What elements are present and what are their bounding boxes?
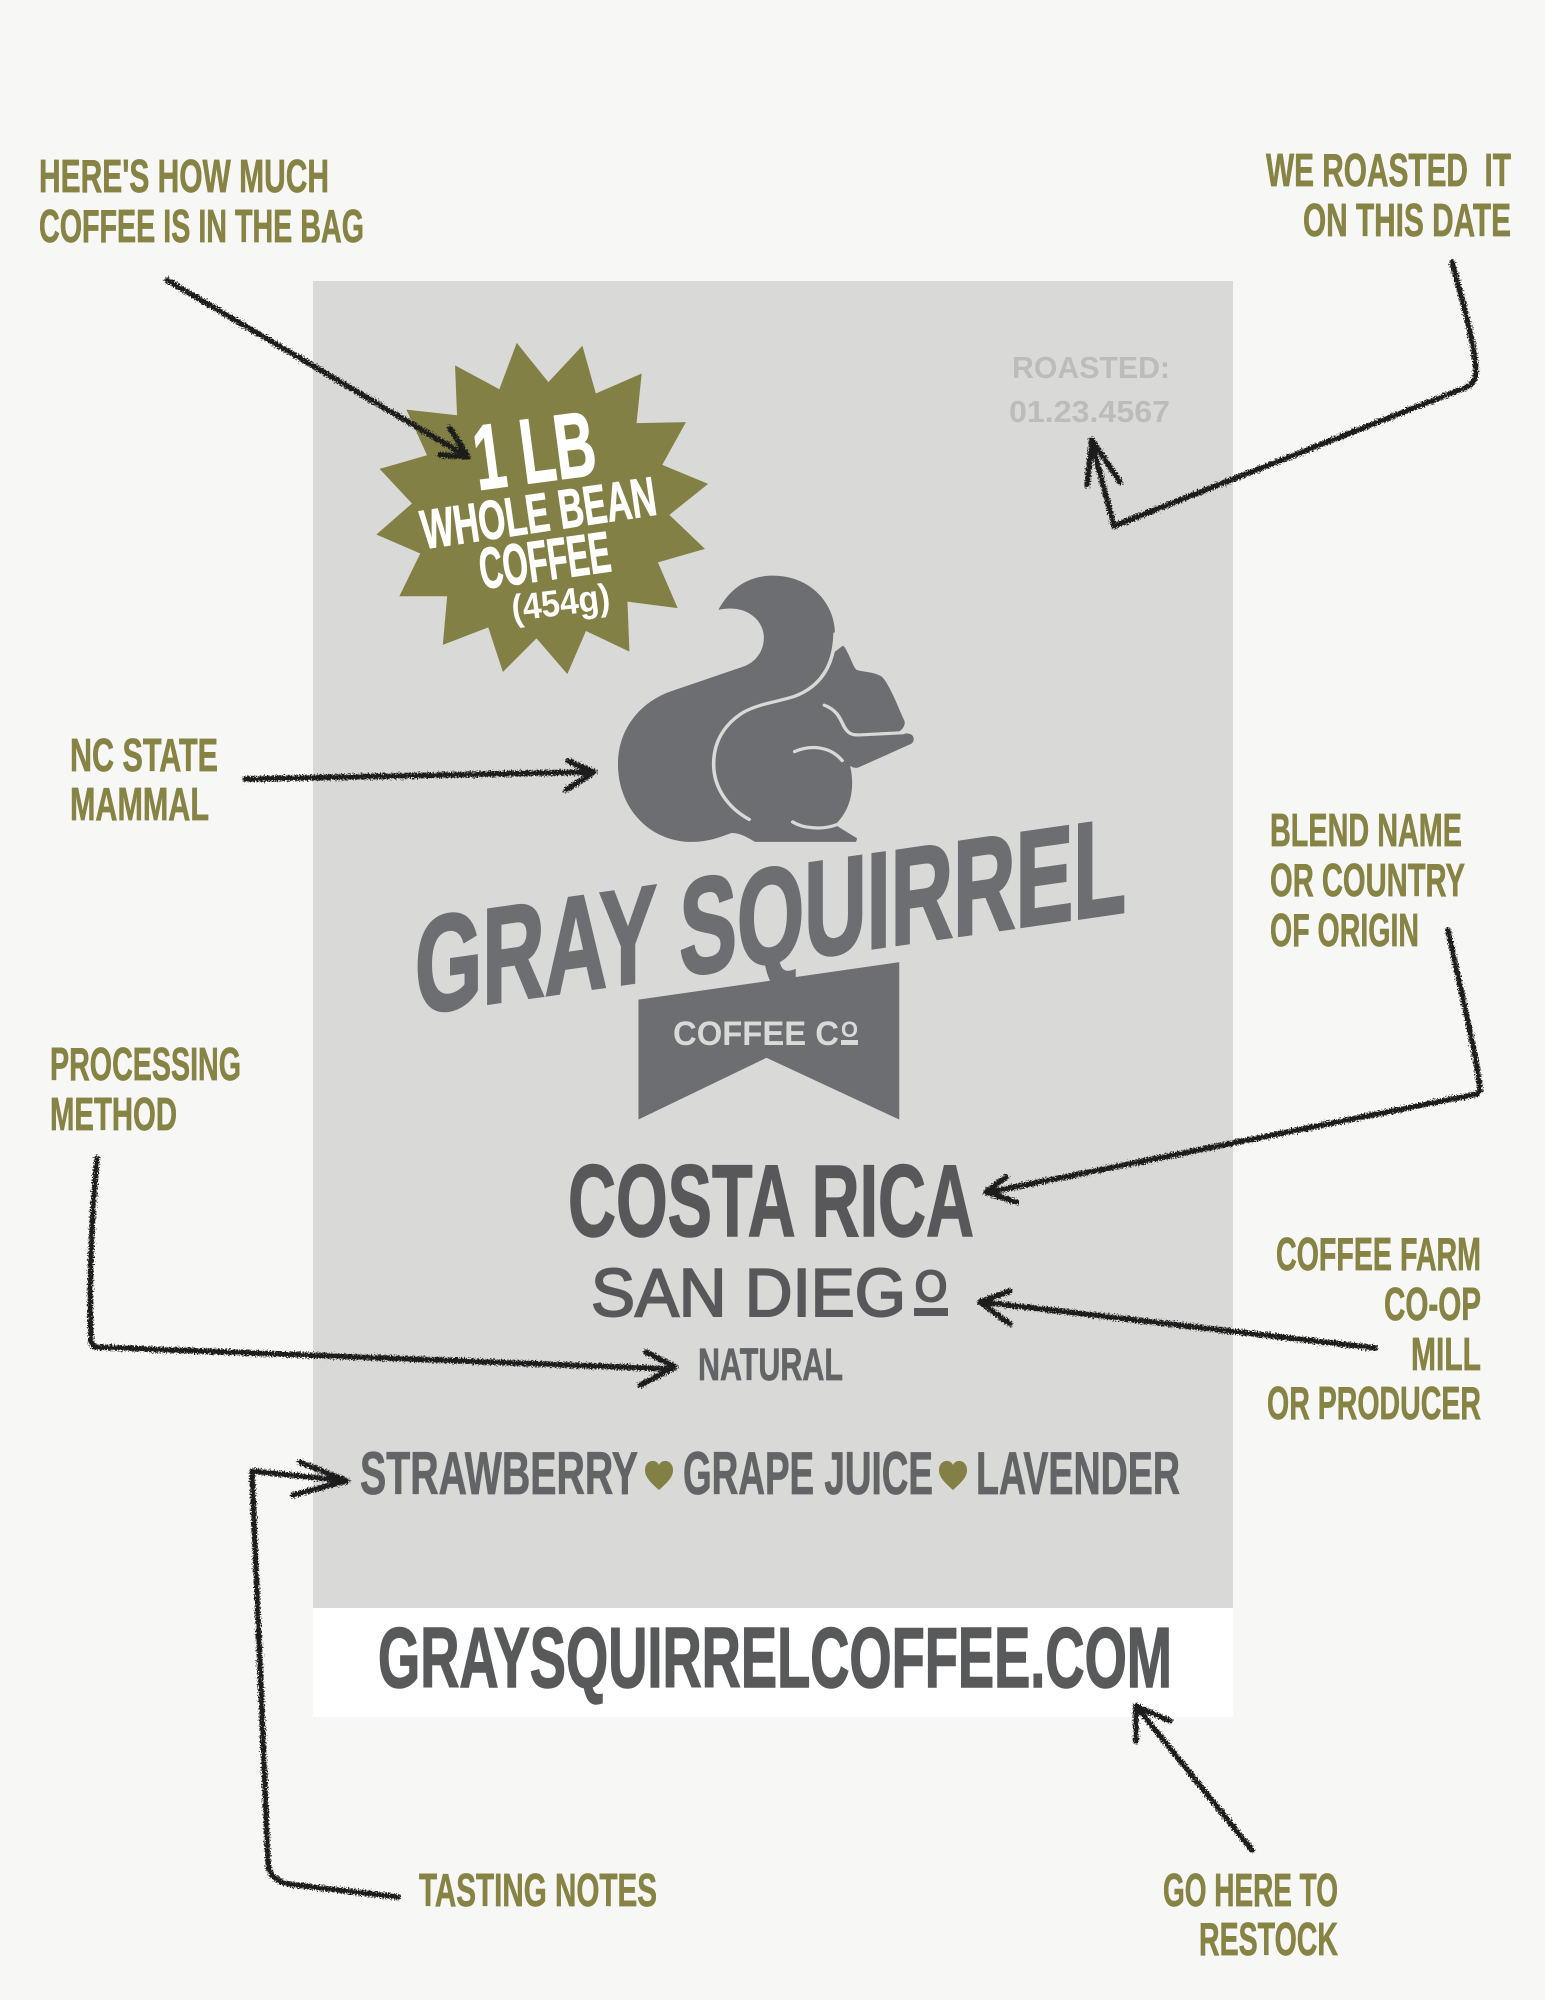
roasted date: 01.23.4567 bbox=[1009, 394, 1170, 429]
panel: coffee bag label bbox=[313, 281, 1233, 1608]
ribbon: coffee co: O bbox=[841, 1017, 858, 1042]
icon: heart bbox=[939, 1461, 967, 1490]
callout: producer bbox=[1267, 1228, 1481, 1429]
ribbon: coffee co: COFFEE C bbox=[673, 1015, 839, 1053]
callout: restock bbox=[1163, 1864, 1338, 1965]
callout: processing method bbox=[50, 1038, 241, 1140]
icon: squirrel logo bbox=[618, 576, 914, 842]
tasting notes line bbox=[360, 1440, 1180, 1507]
callout: producer: CO-OP bbox=[1384, 1278, 1481, 1330]
arrow: to origin bbox=[986, 930, 1480, 1202]
coffee origin name: COSTA RICA bbox=[568, 1144, 974, 1258]
starburst badge: (454g) bbox=[509, 576, 612, 629]
callout: processing method: METHOD bbox=[50, 1088, 177, 1140]
arrow: to roast date bbox=[1087, 262, 1476, 526]
roasted date: ROASTED: bbox=[1012, 350, 1170, 385]
tasting notes line: LAVENDER bbox=[976, 1440, 1180, 1507]
starburst badge: COFFEE bbox=[475, 520, 615, 602]
starburst badge: WHOLE BEAN bbox=[417, 465, 660, 561]
brand name: GRAY SQUIRREL bbox=[415, 788, 1126, 1043]
callout: state mammal: MAMMAL bbox=[70, 778, 209, 830]
arrow: to website bbox=[1136, 1706, 1252, 1850]
icon: heart bbox=[645, 1461, 673, 1490]
callout: roast date bbox=[1266, 144, 1511, 246]
arrow: to squirrel bbox=[245, 761, 594, 790]
callout: state mammal: NC STATE bbox=[70, 729, 218, 781]
processing method: NATURAL bbox=[698, 1339, 843, 1390]
callout: blend name: OF ORIGIN bbox=[1270, 904, 1419, 956]
callout: tasting notes: TASTING NOTES bbox=[419, 1864, 657, 1916]
starburst badge: 1 LB bbox=[467, 393, 602, 510]
roasted date bbox=[1009, 350, 1170, 429]
tasting notes line: STRAWBERRY bbox=[360, 1440, 638, 1507]
callout: state mammal bbox=[70, 729, 218, 830]
callout: how much coffee: COFFEE IS IN THE BAG bbox=[39, 200, 364, 252]
starburst badge bbox=[376, 343, 708, 674]
arrow: to processing bbox=[90, 1158, 675, 1385]
arrow: to tasting notes bbox=[252, 1462, 398, 1897]
callout: processing method: PROCESSING bbox=[50, 1038, 241, 1090]
tasting notes line: GRAPE JUICE bbox=[683, 1440, 933, 1507]
callout: restock: RESTOCK bbox=[1199, 1913, 1338, 1965]
callout: restock: GO HERE TO bbox=[1163, 1864, 1338, 1916]
callout: how much coffee bbox=[39, 150, 364, 252]
ribbon: coffee co bbox=[638, 962, 899, 1119]
producer name: O bbox=[914, 1260, 948, 1312]
producer name: SAN DIEG bbox=[591, 1255, 906, 1331]
panel: website strip bbox=[313, 1608, 1233, 1717]
callout: producer: MILL bbox=[1411, 1328, 1481, 1380]
callout: how much coffee: HERE'S HOW MUCH bbox=[39, 150, 329, 202]
arrow: to producer bbox=[980, 1291, 1375, 1348]
arrow: to weight badge bbox=[167, 280, 468, 457]
callout: blend name bbox=[1270, 804, 1465, 956]
